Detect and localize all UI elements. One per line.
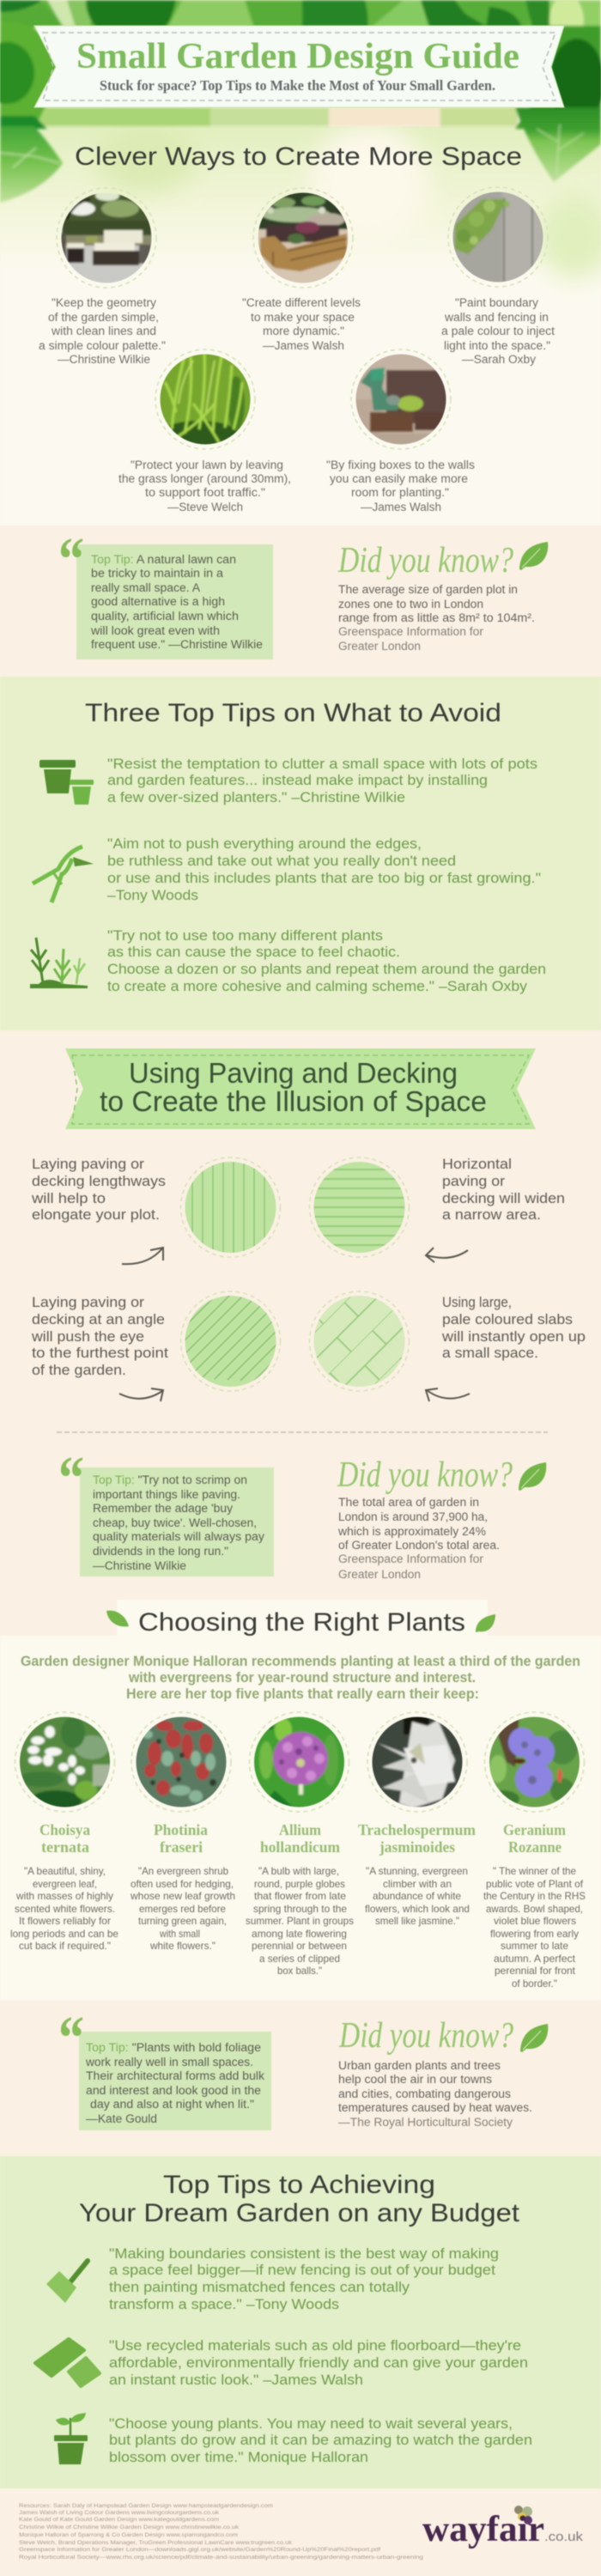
fact text: Urban garden plants and trees: [338, 2059, 501, 2072]
plant 3 name and text: "A bulb with large,: [258, 1865, 339, 1877]
tip text: Remember the adage 'buy: [93, 1502, 233, 1515]
budget tip 3 text: but plants do grow and it can be amazing to watch the garden: [109, 2432, 532, 2448]
panel: paving ribbon heading: [65, 1048, 536, 1129]
fact text: [338, 2059, 532, 2129]
panel: budget tips: [35, 2245, 532, 2465]
quote 1: with clean lines and: [51, 325, 156, 337]
tip text: [90, 553, 263, 651]
plant 4 name and text: flowers, which look and: [365, 1903, 470, 1915]
plant 5 name and text: perennial for front: [495, 1965, 576, 1977]
tip text: [93, 1473, 264, 1572]
arrow 4: [426, 1388, 470, 1401]
icon: mixed plants: [30, 938, 88, 988]
intro text: with evergreens for year-round structure and interest.: [128, 1670, 476, 1686]
tip 1 text: a few over-sized planters." –Christine Wilkie: [107, 789, 405, 805]
plant 5 name and text: autumn. A perfect: [494, 1953, 576, 1965]
plant 2 name and text: white flowers.": [149, 1940, 216, 1952]
plant 5 name and text: [483, 1821, 586, 1990]
text: lengthways: elongate your plot.: [32, 1206, 160, 1223]
quote 5: you can easily make more: [330, 472, 468, 485]
text: angle: [31, 1294, 168, 1378]
budget tip 2 text: an instant rustic look." –James Walsh: [109, 2372, 363, 2388]
plant 1 name and text: It flowers reliably for: [19, 1915, 111, 1927]
plant 5 name and text: of border.": [512, 1978, 557, 1990]
sources: Royal Horticultural Society—www.rhs.org.uk/science/pdf/climate-and-sustainability/urban-greening/gardening-matters-urban-greening: [19, 2555, 423, 2561]
heading: dream garden on any budget: [79, 2171, 520, 2227]
plant 3 name and text: Allium: [279, 1821, 321, 1838]
tip 2 text: [107, 835, 541, 903]
tip text: will look great even with: [90, 624, 220, 637]
circle: diagonal stripes: [179, 1290, 282, 1393]
fact text: which is approximately 24%: [337, 1525, 486, 1538]
tip text: dividends in the long run.": [93, 1545, 228, 1558]
plant 3 name and text: that flower from late: [254, 1890, 346, 1902]
subtitle: Stuck for space? Top Tips to Make the Most of Your Small Garden.: [100, 77, 495, 94]
quote 1: a simple colour palette.": [39, 339, 166, 352]
icon: leaf: [520, 2024, 548, 2052]
quote 3: —Sarah Oxby: [462, 353, 536, 366]
text: lengthways: will help to: [31, 1190, 106, 1206]
plant 3 name and text: a series of clipped: [259, 1953, 340, 1965]
fact text: of Greater London's total area.: [338, 1539, 500, 1552]
tip text: —Kate Gould: [86, 2112, 157, 2125]
quote 3: a pale colour to inject: [441, 325, 555, 337]
icon: plant pots: [39, 760, 94, 805]
plant 3 name and text: spring through to the: [253, 1903, 347, 1915]
heading: dream garden on any budget: Your Dream Garden on any Budget: [79, 2199, 520, 2227]
fact text: [338, 583, 535, 653]
text: slabs: Using large,: [442, 1294, 512, 1310]
quote 5: [326, 459, 475, 513]
plant 5 name and text: flowering from early: [490, 1928, 579, 1940]
panel: paving ribbon heading: to Create the Illusion of Space: [100, 1085, 487, 1117]
text: angle: will push the eye: [31, 1328, 144, 1345]
plant 3 name and text: box balls.": [277, 1965, 322, 1977]
icon: paint brush: [46, 2261, 88, 2303]
tip 2 text: –Tony Woods: [107, 887, 198, 903]
tip 2 text: or use and this includes plants that are too big or fast growing.": [107, 870, 541, 886]
text: angle: Laying paving or: [32, 1294, 144, 1310]
plant 1 name and text: ternata: [41, 1838, 89, 1856]
panel: did you know 2: Did you know?: [337, 1455, 513, 1495]
arrow 3: [119, 1388, 163, 1401]
fact text: range from as little as 8m² to 104m².: [338, 611, 535, 624]
sources: Kate Gould of Kate Gould Garden Design www.kategouldgardens.com: [19, 2517, 219, 2523]
plant 4 name and text: climber with an: [383, 1878, 452, 1890]
quote 4: to support foot traffic.": [145, 486, 265, 499]
quote mark: “: [58, 1443, 84, 1512]
tip 2 text: "Aim not to push everything around the edges,: [107, 835, 422, 852]
logo: wayfair: [422, 2506, 584, 2549]
tip 1 text: [107, 756, 537, 805]
budget tip 2 text: [109, 2337, 528, 2388]
text: angle: decking at an angle: [32, 1311, 165, 1327]
tip 1 text: "Resist the temptation to clutter a small space with lots of pots: [107, 756, 537, 772]
fact text: —The Royal Horticultural Society: [338, 2116, 513, 2129]
tip text: frequent use." —Christine Wilkie: [91, 638, 263, 651]
text: horizontal: Horizontal: [442, 1156, 512, 1172]
fact text: [337, 1496, 500, 1581]
photo: pale fence with ivy: [448, 187, 548, 287]
sources: James Walsh of Living Colour Gardens www.livingcolourgardens.co.uk: [19, 2510, 220, 2516]
text: angle: to the furthest point: [32, 1345, 168, 1361]
tip text: day and also at night when lit.": [90, 2098, 254, 2111]
quote 3: walls and fencing in: [444, 311, 549, 324]
photo: raised timber bed: [253, 188, 353, 288]
sources: [19, 2503, 423, 2561]
sources: Monique Halloran of Sparrong & Co Garden Design www.sparrongandco.com: [19, 2532, 238, 2538]
tip text: work really well in small spaces.: [85, 2056, 253, 2069]
plant 4 name and text: [358, 1821, 476, 1927]
plant 1 name and text: Choisya: [39, 1821, 90, 1838]
budget tip 2 text: "Use recycled materials such as old pine floorboard—they're: [109, 2337, 521, 2354]
quote 1: of the garden simple,: [48, 311, 159, 324]
text: slabs: pale coloured slabs: [442, 1311, 573, 1327]
logo: wayfair: wayfair: [422, 2510, 544, 2549]
circle: vertical stripes: [180, 1157, 280, 1257]
quote 5: room for planting.": [351, 486, 449, 499]
plant 3 name and text: among late flowering: [252, 1928, 347, 1940]
tip text: and interest and look good in the: [86, 2084, 261, 2097]
budget tip 3 text: [109, 2415, 532, 2465]
quote 2: more dynamic.": [263, 325, 344, 337]
title ribbon: [34, 26, 564, 107]
photo: choisya: [15, 1712, 115, 1812]
tip text: Top Tip: "Plants with bold foliage: [86, 2041, 261, 2054]
quote 1: "Keep the geometry: [52, 296, 156, 309]
plant 4 name and text: "A stunning, evergreen: [366, 1865, 468, 1877]
tip 2 text: be ruthless and take out what you really don't need: [107, 853, 456, 869]
fact text: help cool the air in our towns: [338, 2073, 492, 2086]
panel: did you know 1: Did you know?: [337, 541, 513, 580]
budget tip 2 text: affordable, environmentally friendly and can give your garden: [109, 2354, 528, 2371]
text: horizontal: a narrow area.: [442, 1206, 541, 1223]
photo: photinia: [131, 1712, 231, 1812]
budget tip 3 text: "Choose young plants. You may need to wait several years,: [109, 2415, 513, 2432]
panel: three top tips: [30, 756, 546, 994]
circle: horizontal stripes: [309, 1157, 410, 1257]
heading: dream garden on any budget: Top Tips to Achieving: [163, 2171, 435, 2199]
plant 5 name and text: awards. Bowl shaped,: [486, 1903, 583, 1915]
icon: leaf: [519, 1462, 546, 1491]
plant 4 name and text: jasminoides: [379, 1838, 455, 1856]
tip 3 text: as this can cause the space to feel chaotic.: [107, 944, 400, 960]
sources: Greenspace Information for Greater London—downloads.gigl.org.uk/website/Garden%20Round-Up%20Final%20report.pdf: [19, 2547, 380, 2553]
text: slabs: will instantly open up: [441, 1328, 586, 1345]
budget tip 1 text: [109, 2245, 499, 2312]
text: slabs: a small space.: [442, 1345, 538, 1361]
plant 1 name and text: scented white flowers.: [15, 1903, 115, 1915]
quote 3: light into the space.": [444, 339, 550, 352]
intro text: [21, 1654, 580, 1702]
panel: did you know 2: [337, 1455, 546, 1581]
tip text: Top Tip: "Try not to scrimp on: [93, 1473, 247, 1486]
quote 2: —James Walsh: [263, 339, 344, 352]
icon: left leaf: [106, 1611, 129, 1626]
panel: did you know 3: Did you know?: [338, 2016, 513, 2056]
text: slabs: [441, 1294, 586, 1361]
icon: bricks: [35, 2339, 100, 2386]
panel: paving patterns: [31, 1156, 586, 1401]
icon: leaf: [519, 542, 548, 570]
tip 3 text: Choose a dozen or so plants and repeat them around the garden: [107, 961, 546, 977]
plant 3 name and text: round, purple globes: [254, 1878, 345, 1890]
circle: large slabs: [309, 1291, 409, 1391]
fact text: Greenspace Information for: [338, 625, 484, 638]
heading: what to avoid: Three Top Tips on What to Avoid: [85, 699, 501, 727]
quote 2: "Create different levels: [242, 296, 361, 309]
budget tip 1 text: a space feel bigger—if new fencing is out of your budget: [109, 2262, 495, 2278]
quote 5: —James Walsh: [361, 501, 441, 513]
plant 2 name and text: emerges red before: [139, 1903, 226, 1915]
plant 2 name and text: "An evergreen shrub: [138, 1865, 228, 1877]
quote 4: —Steve Welch: [167, 501, 243, 513]
plant 1 name and text: cut back if required.": [19, 1940, 111, 1952]
tip text: quality materials will always pay: [93, 1530, 264, 1543]
sources: Resources: Sarah Daly of Hampstead Garden Design www.hampsteadgardendesign.com: [19, 2503, 273, 2509]
photo: trachelospermum: [367, 1712, 467, 1812]
tip text: Their architectural forms add bulk: [86, 2069, 264, 2082]
tip text: Top Tip: A natural lawn can: [91, 553, 236, 566]
quote 4: the grass longer (around 30mm),: [118, 472, 291, 485]
quote 1: [39, 296, 166, 366]
photo: allium: [249, 1712, 349, 1812]
title: Small Garden Design Guide: [76, 37, 519, 76]
intro text: Garden designer Monique Halloran recommends planting at least a third of the garden: [21, 1654, 580, 1669]
text: lengthways: Laying paving or: [32, 1156, 144, 1172]
quote mark: “: [58, 525, 84, 593]
plant 4 name and text: smell like jasmine.": [375, 1915, 459, 1927]
plant 5 name and text: Geranium: [503, 1821, 566, 1838]
fact text: The total area of garden in: [338, 1496, 479, 1509]
plant 5 name and text: " The winner of the: [493, 1865, 576, 1877]
tip 3 text: [107, 927, 546, 994]
text: horizontal: [442, 1156, 565, 1223]
sources: Christine Wilkie of Christine Wilkie Garden Design www.christinewilkie.co.uk: [19, 2524, 240, 2530]
icon: right leaf: [476, 1614, 495, 1632]
plant 2 name and text: often used for hedging,: [131, 1878, 234, 1890]
plant 2 name and text: whose new leaf growth: [130, 1890, 235, 1902]
plant 3 name and text: summer. Plant in groups: [246, 1915, 354, 1927]
plant 3 name and text: [246, 1821, 354, 1977]
panel: clever ways photos and quotes: [39, 187, 555, 513]
text: horizontal: paving or: [442, 1173, 505, 1189]
budget tip 1 text: then painting mismatched fences can totally: [109, 2279, 410, 2295]
plant 5 name and text: the Century in the RHS: [483, 1890, 586, 1902]
tip 1 text: and garden features... instead make impact by installing: [107, 772, 488, 788]
quote 3: "Paint boundary: [455, 296, 538, 309]
plant 2 name and text: with small: [159, 1928, 200, 1940]
text: lengthways: decking lengthways: [32, 1173, 166, 1189]
tip text: quality, artificial lawn which: [91, 610, 239, 623]
panel: top tip 3: [58, 2003, 271, 2130]
panel: top tip 1: [58, 525, 273, 659]
text: lengthways: [31, 1156, 166, 1223]
photo: patio furniture: [57, 188, 156, 288]
plant 1 name and text: [10, 1821, 118, 1952]
plant 3 name and text: perennial or between: [252, 1940, 347, 1952]
icon: seedling: [54, 2413, 88, 2464]
plant 2 name and text: turning green again,: [138, 1915, 227, 1927]
fact text: and cities, combating dangerous: [338, 2087, 511, 2100]
arrow 2: [426, 1248, 468, 1262]
plant 4 name and text: abundance of white: [373, 1890, 461, 1902]
text: horizontal: decking will widen: [442, 1190, 565, 1206]
plant 5 name and text: public vote of Plant of: [486, 1878, 584, 1890]
budget tip 3 text: blossom over time." Monique Halloran: [109, 2449, 368, 2465]
tip text: important things like paving.: [93, 1488, 240, 1501]
budget tip 1 text: "Making boundaries consistent is the best way of making: [109, 2245, 499, 2262]
sources: Steve Welch, Brand Operations Manager, TruGreen Professional LawnCare www.trugreen.co.uk: [19, 2540, 293, 2546]
plant 1 name and text: evergreen leaf,: [33, 1878, 97, 1890]
panel: five plants: [10, 1712, 586, 1990]
fact text: temperatures caused by heat waves.: [338, 2101, 532, 2114]
panel: top tip 2: [58, 1443, 274, 1577]
fact text: London is around 37,900 ha,: [338, 1510, 488, 1523]
plant 2 name and text: fraseri: [160, 1838, 203, 1856]
quote 3: [441, 296, 555, 366]
tip 3 text: "Try not to use too many different plants: [107, 927, 383, 944]
decoration: leaf canopy: [0, 0, 601, 203]
quote 4: [118, 459, 291, 513]
intro text: Here are her top five plants that really earn their keep:: [126, 1686, 479, 1702]
budget tip 1 text: transform a space." –Tony Woods: [109, 2296, 339, 2312]
plant 5 name and text: violet blue flowers: [494, 1915, 576, 1927]
photo: long grass: [155, 349, 255, 449]
icon: secateurs: [33, 847, 94, 902]
quote 1: —Christine Wilkie: [58, 353, 150, 366]
panel: did you know 1: [337, 541, 548, 653]
quote 4: "Protect your lawn by leaving: [131, 459, 283, 471]
tip text: really small space. A: [91, 581, 200, 594]
quote mark: “: [58, 2003, 84, 2072]
text: angle: of the garden.: [32, 1362, 126, 1378]
fact text: Greenspace Information for: [338, 1552, 484, 1565]
plant 5 name and text: summer to late: [501, 1940, 568, 1952]
plant 5 name and text: Rozanne: [508, 1838, 562, 1856]
fact text: Greater London: [338, 1568, 421, 1581]
heading: clever ways: Clever Ways to Create More Space: [75, 143, 522, 171]
quote 2: [242, 296, 361, 352]
arrow 1: [122, 1248, 163, 1264]
panel: paving ribbon heading: Using Paving and Decking: [129, 1057, 458, 1089]
plant 2 name and text: Photinia: [154, 1821, 208, 1838]
fact text: Greater London: [338, 640, 421, 653]
tip text: cheap, buy twice'. Well-chosen,: [93, 1516, 257, 1529]
logo: wayfair: .co.uk: [544, 2530, 584, 2544]
fact text: zones one to two in London: [338, 598, 483, 611]
quote 5: "By fixing boxes to the walls: [326, 459, 475, 471]
plant 1 name and text: with masses of highly: [15, 1890, 113, 1902]
plant 1 name and text: "A beautiful, shiny,: [24, 1865, 106, 1877]
tip text: be tricky to maintain in a: [91, 567, 224, 580]
quote 2: to make your space: [251, 311, 355, 324]
tip 3 text: to create a more cohesive and calming scheme." –Sarah Oxby: [107, 978, 528, 994]
fact text: The average size of garden plot in: [338, 583, 518, 596]
heading: choosing the right plants: Choosing the Right Plants: [138, 1608, 465, 1637]
tip text: good alternative is a high: [91, 595, 225, 608]
photo: geranium: [484, 1712, 584, 1812]
panel: did you know 3: [338, 2016, 548, 2129]
plant 3 name and text: hollandicum: [260, 1838, 340, 1856]
tip text: [85, 2041, 264, 2125]
plant 1 name and text: long periods and can be: [10, 1928, 118, 1940]
plant 4 name and text: Trachelospermum: [358, 1821, 476, 1838]
tip text: —Christine Wilkie: [93, 1559, 186, 1572]
plant 2 name and text: [130, 1821, 235, 1952]
photo: wall boxes: [351, 349, 451, 449]
